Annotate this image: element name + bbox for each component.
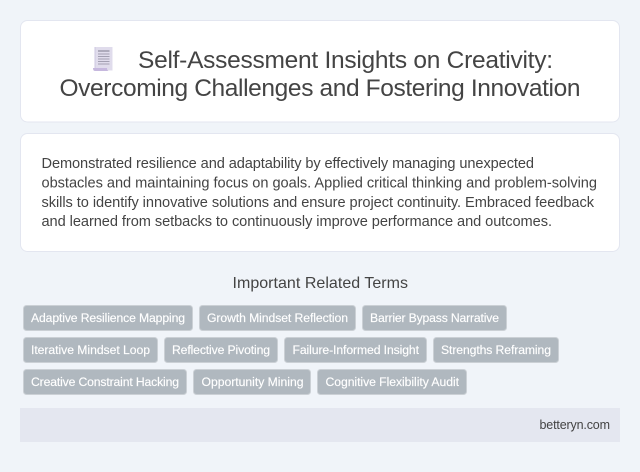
title: Overcoming Challenges and Fostering Innovation: [60, 75, 580, 102]
summary text: skills to identify innovative solutions and ensure project continuity. Embraced feedback: [42, 195, 595, 211]
panel: title card: [20, 20, 620, 122]
tag: strengths reframing: Strengths Reframing: [441, 343, 551, 357]
title: [60, 47, 580, 102]
tag: creative constraint hacking: [24, 370, 186, 394]
tag: failure-informed insight: [284, 338, 426, 362]
tag: barrier bypass narrative: Barrier Bypass Narrative: [370, 311, 499, 325]
tag: growth mindset reflection: Growth Mindset Reflection: [207, 311, 348, 325]
tag: growth mindset reflection: [200, 306, 356, 330]
footer bar: [20, 408, 620, 442]
panel: summary card: [20, 134, 620, 252]
tag: iterative mindset loop: Iterative Mindset Loop: [31, 343, 150, 357]
footer site name: betteryn.com: [540, 418, 610, 432]
tag: adaptive resilience mapping: [24, 306, 192, 330]
tag: strengths reframing: [434, 338, 558, 362]
tag: adaptive resilience mapping: Adaptive Resilience Mapping: [31, 311, 185, 325]
title: Self-Assessment Insights on Creativity:: [138, 47, 553, 74]
tags: related terms: [24, 306, 558, 394]
tag: cognitive flexibility audit: [318, 370, 466, 394]
tag: creative constraint hacking: Creative Constraint Hacking: [31, 375, 179, 389]
tag: opportunity mining: [194, 370, 310, 394]
tag: reflective pivoting: Reflective Pivoting: [172, 343, 270, 357]
summary text: [42, 156, 597, 230]
summary text: obstacles and maintaining focus on goals. Applied critical thinking and problem-solving: [42, 176, 597, 192]
tag: failure-informed insight: Failure-Informed Insight: [292, 343, 420, 357]
summary text: and learned from setbacks to continuously improve performance and outcomes.: [42, 214, 552, 230]
summary text: Demonstrated resilience and adaptability by effectively managing unexpected: [42, 156, 534, 172]
tag: barrier bypass narrative: [362, 306, 506, 330]
tag: opportunity mining: Opportunity Mining: [202, 375, 304, 389]
tag: reflective pivoting: [164, 338, 278, 362]
tag: cognitive flexibility audit: Cognitive Flexibility Audit: [326, 375, 460, 389]
tag: iterative mindset loop: [24, 338, 158, 362]
icon: document scroll: [93, 47, 112, 71]
heading: important related terms: Important Related Terms: [232, 275, 408, 292]
